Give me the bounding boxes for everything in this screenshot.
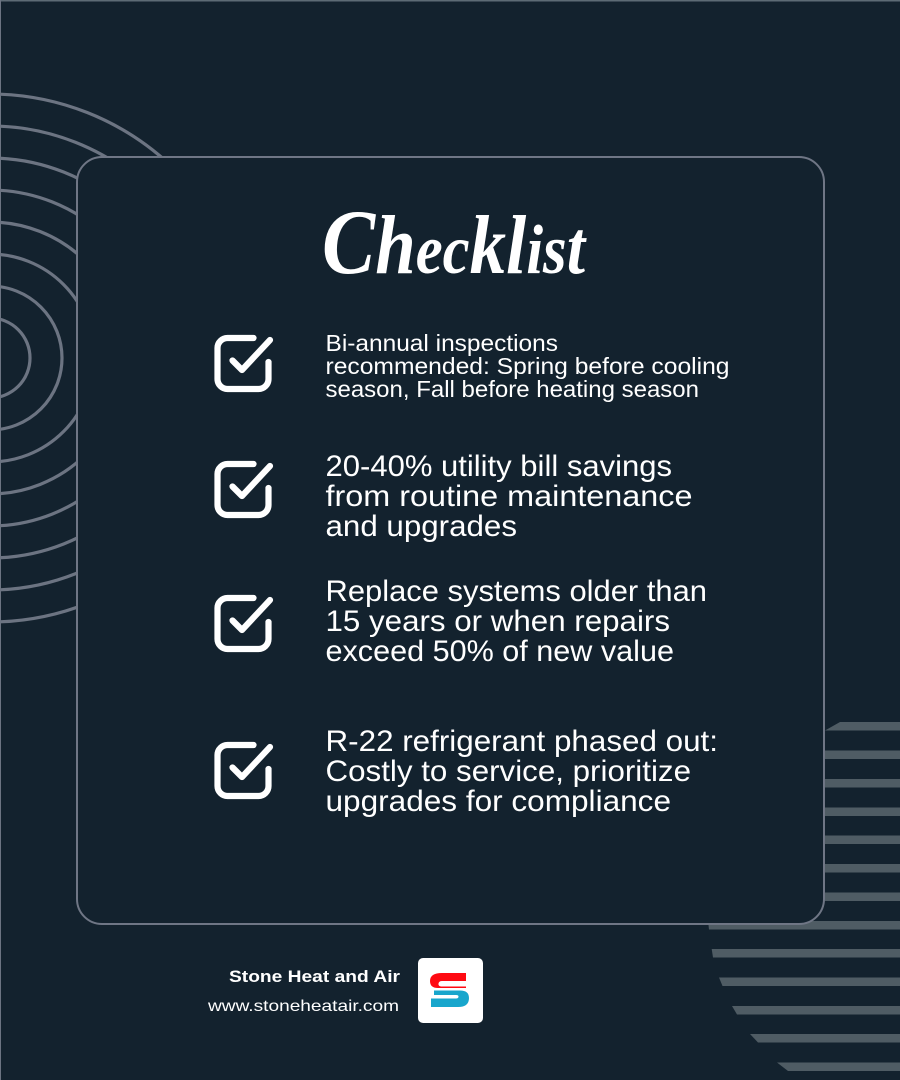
- icon: checkbox 4: [218, 745, 270, 796]
- text: item 3: Replace systems older than: [326, 575, 707, 608]
- title: Checklist: [322, 191, 587, 293]
- text: item 1: recommended: Spring before cooling: [326, 353, 730, 379]
- company name: Stone Heat and Air: [229, 967, 400, 986]
- text: item 4: R-22 refrigerant phased out:: [326, 725, 718, 758]
- website: www.stoneheatair.com: [207, 998, 399, 1015]
- text: item 3: 15 years or when repairs: [326, 605, 670, 638]
- decorative concentric circles: [0, 94, 254, 622]
- text: item 3: [326, 575, 707, 668]
- checklist item 1: [218, 330, 730, 402]
- text: item 4: [326, 725, 718, 818]
- text: item 1: Bi-annual inspections: [326, 330, 558, 356]
- text: item 2: and upgrades: [326, 510, 517, 543]
- checklist item 2: [218, 450, 692, 543]
- icon: checkbox 2: [218, 464, 270, 515]
- text: item 3: exceed 50% of new value: [326, 635, 674, 668]
- text: item 1: season, Fall before heating season: [326, 376, 699, 402]
- footer: [207, 958, 483, 1023]
- text: item 4: Costly to service, prioritize: [326, 755, 691, 788]
- checklist item 4: [218, 725, 718, 818]
- text: item 1: [326, 330, 730, 402]
- decorative striped circle: [708, 722, 900, 1071]
- panel: checklist card: [77, 157, 824, 924]
- icon: checkbox 3: [218, 598, 270, 649]
- text: item 4: upgrades for compliance: [326, 785, 671, 818]
- text: item 2: from routine maintenance: [326, 480, 692, 513]
- logo: [418, 958, 483, 1023]
- checklist item 3: [218, 575, 707, 668]
- text: item 2: [326, 450, 692, 543]
- text: item 2: 20-40% utility bill savings: [326, 450, 672, 483]
- icon: checkbox 1: [218, 338, 270, 389]
